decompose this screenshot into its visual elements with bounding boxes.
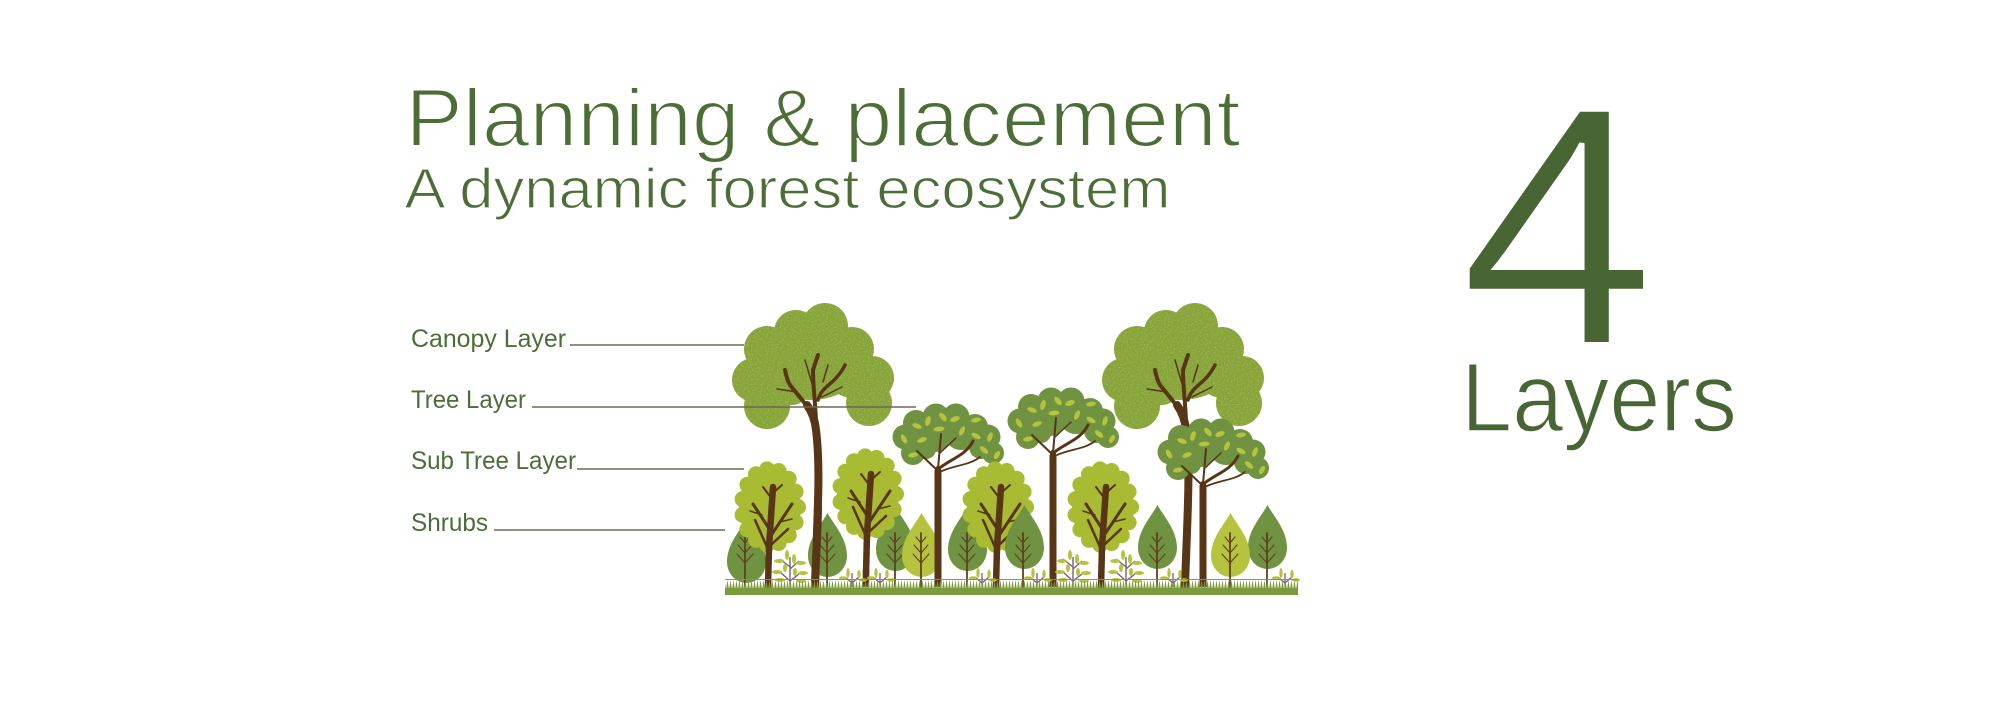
sub tree layer: round tree 2 bbox=[833, 448, 904, 587]
big number 4: 4 bbox=[1459, 36, 1656, 418]
shrub layer: dark teardrop trees behind bbox=[727, 507, 987, 583]
label: Tree Layer: Tree Layer bbox=[411, 386, 526, 414]
canopy layer tree, right bbox=[1102, 303, 1264, 587]
small leafy shrubs bbox=[772, 550, 1300, 587]
tree layer: umbrella tree 2 bbox=[1008, 388, 1119, 587]
canopy layer tree, left bbox=[732, 303, 894, 587]
subtitle: A dynamic forest ecosystem: A dynamic forest ecosystem bbox=[404, 157, 1170, 221]
label: Shrubs: Shrubs bbox=[411, 509, 488, 537]
teardrop stems behind bbox=[737, 533, 975, 587]
caption: Layers: Layers bbox=[1461, 343, 1737, 452]
tree layer: umbrella tree 3 bbox=[1158, 418, 1269, 587]
sub tree layer: round tree 4 bbox=[1068, 461, 1139, 587]
grass strip bbox=[725, 579, 1298, 595]
title: Planning & placement: Planning & placement bbox=[406, 73, 1241, 164]
shrub layer: teardrop trees in front bbox=[902, 505, 1287, 587]
sub tree layer: round tree 3 bbox=[963, 461, 1034, 587]
sub tree layer: round tree 1 bbox=[735, 461, 806, 587]
forest illustration bbox=[725, 303, 1300, 595]
label: Sub Tree Layer: Sub Tree Layer bbox=[411, 447, 576, 475]
label: Canopy Layer: Canopy Layer bbox=[411, 325, 566, 353]
layer labels with leader lines bbox=[411, 325, 916, 537]
tree layer: umbrella tree 1 bbox=[892, 404, 1004, 587]
foreground trunks over teardrops bbox=[815, 505, 938, 587]
